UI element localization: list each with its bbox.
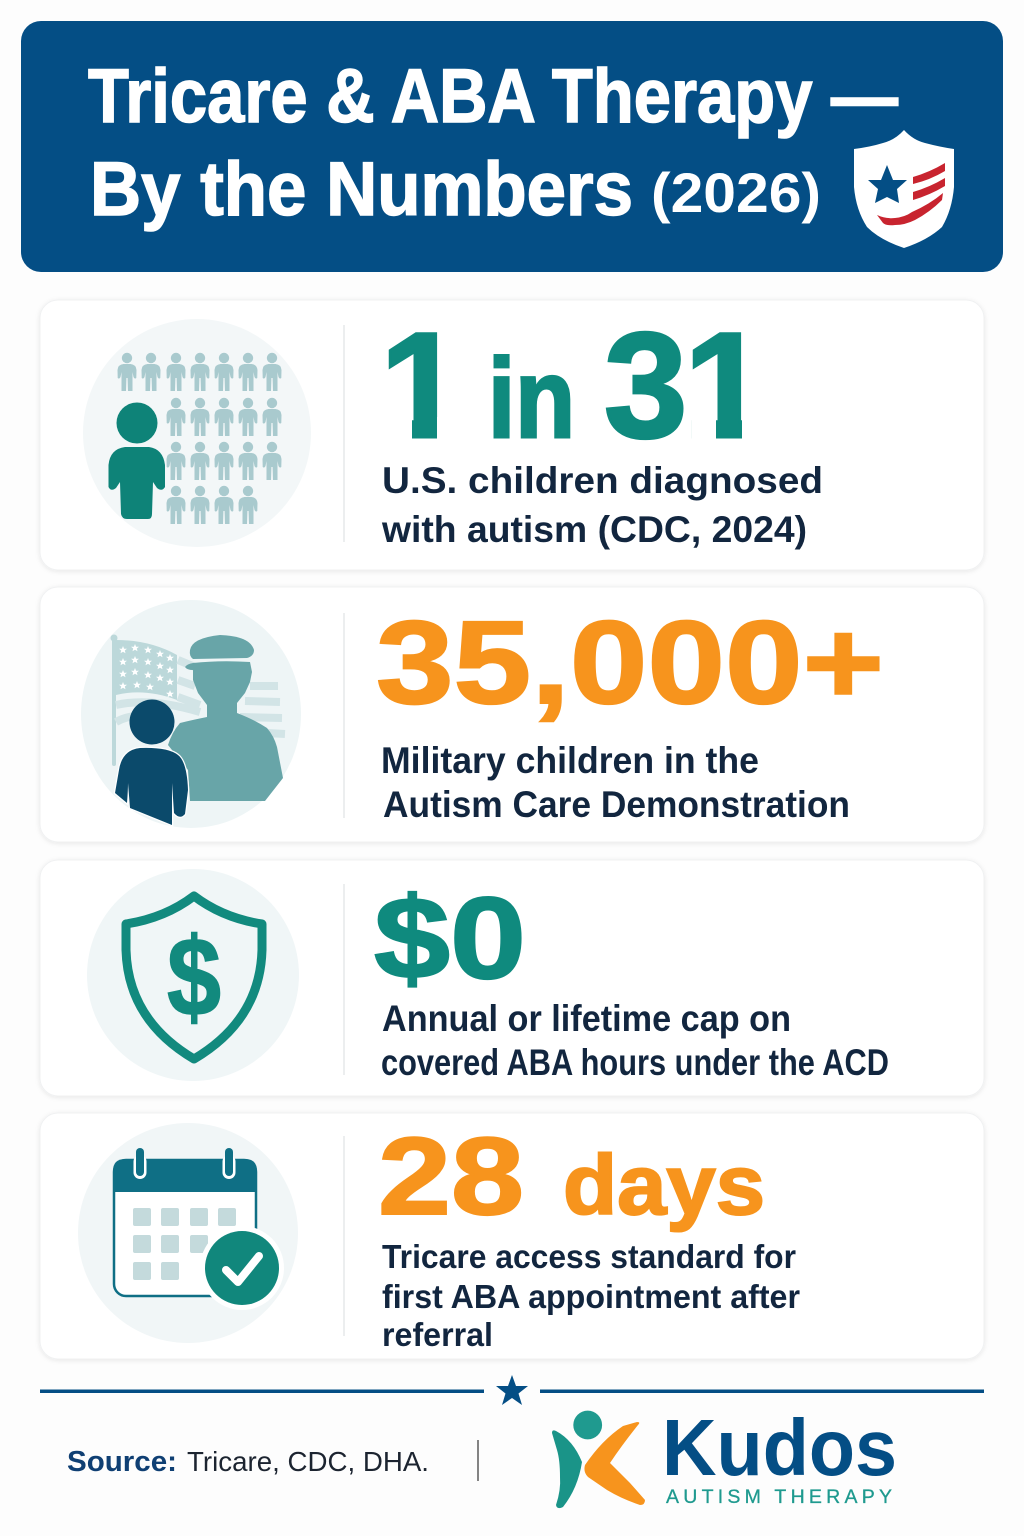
icon: shield with dollar sign <box>87 869 299 1081</box>
title line 1: Tricare & ABA Therapy — <box>88 54 898 139</box>
stat: 1 in 31: 31 <box>604 301 767 469</box>
icon: one child among many <box>83 319 311 547</box>
stat: 1 in 31 <box>388 330 742 440</box>
footer divider with star <box>40 1375 984 1405</box>
description: first ABA appointment after <box>382 1278 800 1315</box>
description: Autism Care Demonstration <box>383 784 850 825</box>
stat: 28 days <box>378 1115 765 1238</box>
description <box>381 740 850 825</box>
logo: Kudos Autism Therapy: Kudos <box>662 1403 897 1492</box>
source note: Source: <box>67 1446 177 1478</box>
logo: Kudos Autism Therapy <box>552 1403 897 1508</box>
description <box>381 998 889 1083</box>
icon: soldier and child with flag <box>81 600 301 828</box>
header banner <box>21 21 1003 272</box>
panel: 35,000+ <box>40 587 984 842</box>
panel: 1 in 31 <box>40 300 984 570</box>
logo mark <box>552 1411 645 1508</box>
icon: patriotic shield <box>854 130 954 248</box>
description <box>382 1238 800 1353</box>
panel: 28 days <box>40 1113 984 1359</box>
description: U.S. children diagnosed <box>382 460 823 501</box>
description: Tricare access standard for <box>382 1238 796 1275</box>
description: Annual or lifetime cap on <box>382 998 791 1039</box>
description: Military children in the <box>381 740 759 781</box>
source note <box>67 1446 429 1478</box>
logo: Kudos Autism Therapy: AUTISM THERAPY <box>666 1486 892 1508</box>
description: referral <box>382 1316 493 1353</box>
title year: (2026) <box>651 161 821 224</box>
title line 2: By the Numbers <box>90 147 633 232</box>
stat: 35,000+: 35,000+ <box>376 597 884 729</box>
panel: $0 <box>40 860 984 1096</box>
stat: 1 in 31: in <box>488 336 575 461</box>
stat: 28 days: 28 <box>378 1115 524 1238</box>
description <box>381 460 823 550</box>
icon: calendar with check <box>78 1123 298 1343</box>
stat: 1 in 31: 1 <box>380 301 463 469</box>
stat: $0: $0 <box>374 873 526 1003</box>
description: covered ABA hours under the ACD <box>381 1042 889 1083</box>
description: with autism (CDC, 2024) <box>381 509 807 550</box>
stat: 28 days: days <box>563 1138 765 1232</box>
icon: shield with dollar sign: $ <box>167 915 221 1039</box>
source note: Tricare, CDC, DHA. <box>187 1446 429 1477</box>
